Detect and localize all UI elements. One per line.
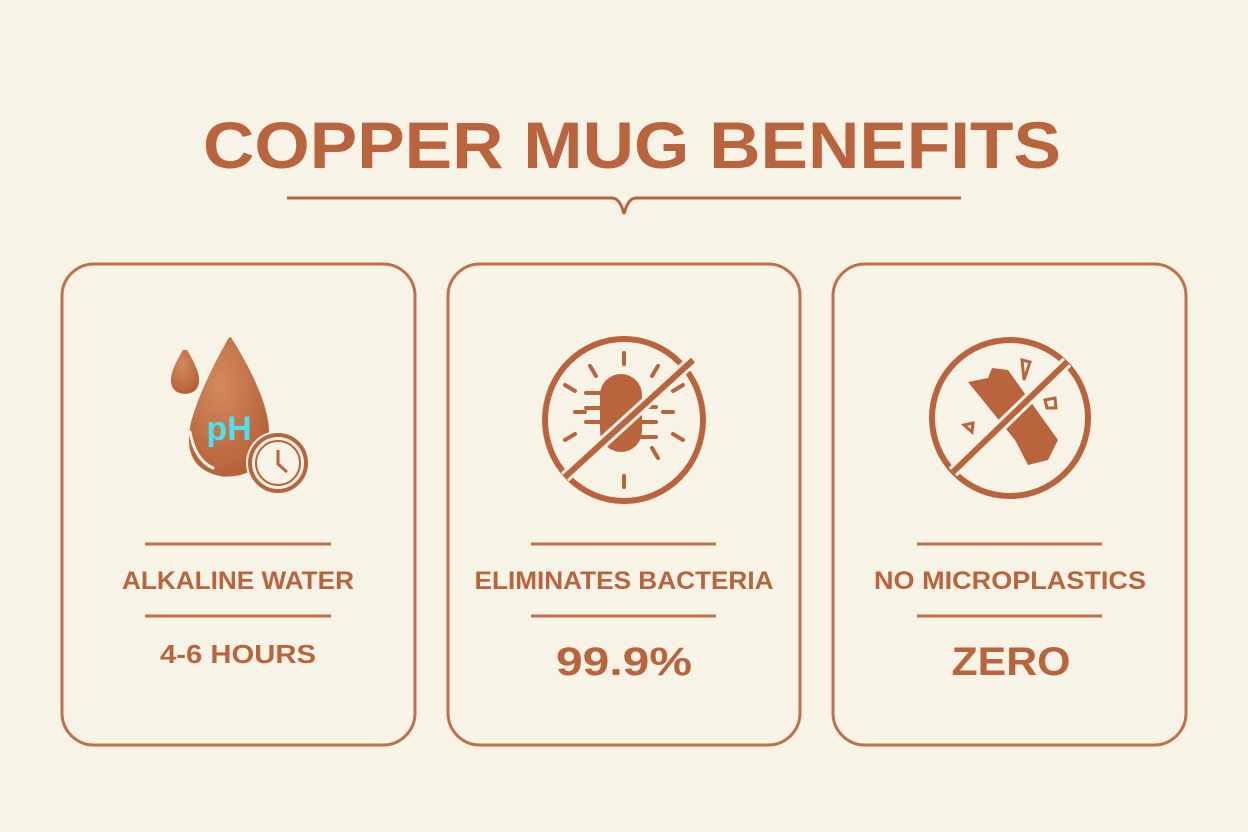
- label: alkaline water: ALKALINE WATER: [122, 567, 354, 595]
- value: 4-6 hours: 4-6 HOURS: [160, 639, 316, 669]
- panel: alkaline water: [62, 264, 415, 745]
- title: COPPER MUG BENEFITS: [203, 108, 1061, 182]
- icon: no bacteria: [545, 339, 703, 501]
- icon: water drops with pH and clock: pH: [206, 410, 252, 448]
- icon: no microplastics: [932, 340, 1088, 496]
- label: no microplastics: NO MICROPLASTICS: [874, 567, 1146, 595]
- panel: no microplastics: [833, 264, 1186, 745]
- value: 99.9%: 99.9%: [556, 640, 692, 684]
- icon: water drops with pH and clock: [171, 336, 310, 495]
- label: eliminates bacteria: ELIMINATES BACTERIA: [474, 567, 774, 595]
- value: zero: ZERO: [952, 640, 1070, 684]
- panel: eliminates bacteria: [448, 264, 800, 745]
